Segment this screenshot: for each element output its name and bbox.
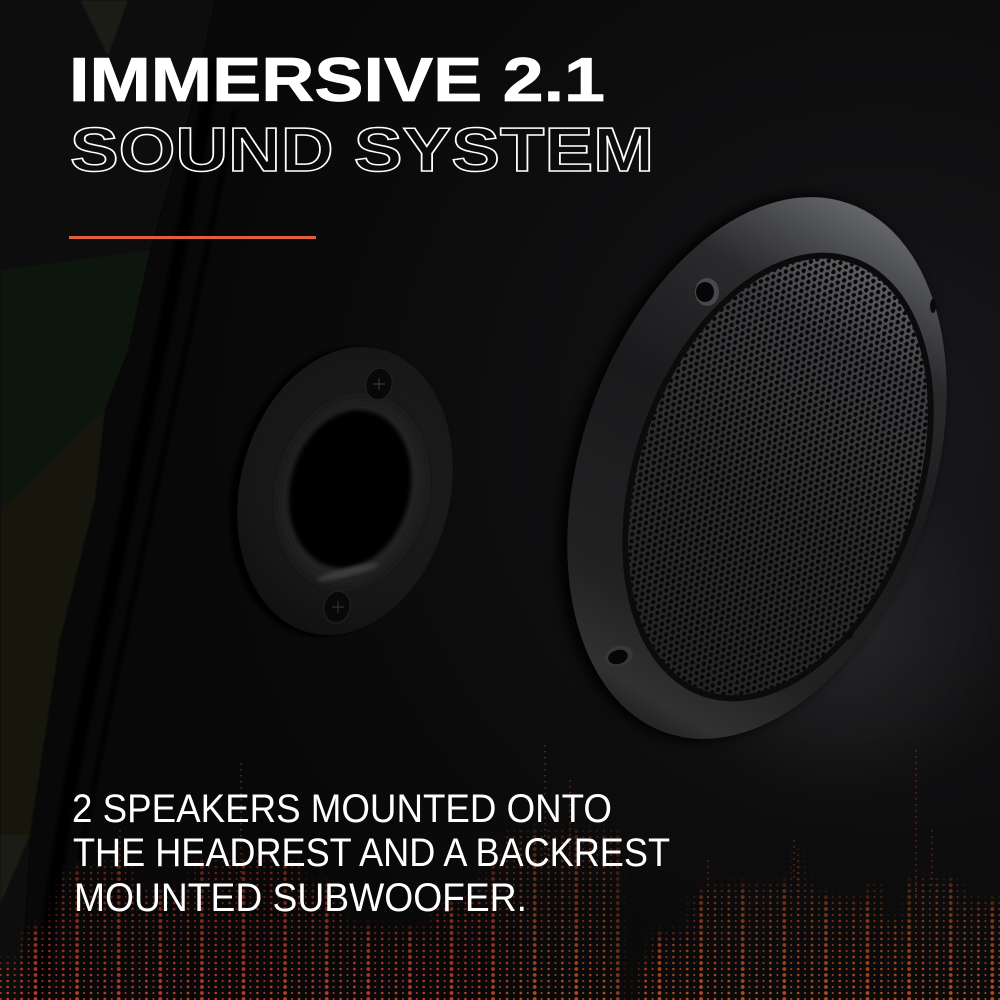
- port hole: [272, 397, 428, 581]
- description text: MOUNTED SUBWOOFER.: [74, 876, 527, 920]
- sound wave dot pattern: [0, 745, 1000, 1000]
- lower screw: [321, 588, 353, 626]
- main speaker: [490, 143, 1000, 793]
- speaker shadow: [490, 143, 1000, 793]
- chair seam: [40, 60, 235, 1000]
- description text: THE HEADREST AND A BACKREST: [73, 831, 670, 875]
- description text: 2 SPEAKERS MOUNTED ONTO: [72, 787, 612, 831]
- mounting hole bottom right: [843, 630, 855, 642]
- camo panel on the left of the seam: [0, 0, 215, 1000]
- title: [69, 46, 654, 185]
- speaker outer ring: [499, 146, 1000, 790]
- mounting hole top left: [695, 278, 719, 306]
- dot field masked by the waveform: [0, 824, 1000, 1000]
- speaker grille: [574, 218, 982, 736]
- subwoofer port: [200, 324, 482, 660]
- speaker mesh holes: [574, 218, 982, 736]
- description text: [72, 787, 670, 920]
- orange divider line: [69, 236, 316, 239]
- waveform spikes: [120, 745, 932, 910]
- glow on the wall around the speaker: [650, 430, 1000, 810]
- mounting hole right: [930, 299, 936, 313]
- port flare: [261, 384, 443, 600]
- mounting hole bottom left: [603, 643, 635, 669]
- port flange: [208, 324, 482, 658]
- title line 1: IMMERSIVE 2.1: [69, 46, 605, 115]
- speaker grille rim: [566, 211, 990, 743]
- title line 2 outlined: SOUND SYSTEM: [70, 116, 654, 185]
- port shadow: [200, 324, 476, 660]
- port highlight: [316, 560, 380, 584]
- upper screw: [363, 365, 395, 403]
